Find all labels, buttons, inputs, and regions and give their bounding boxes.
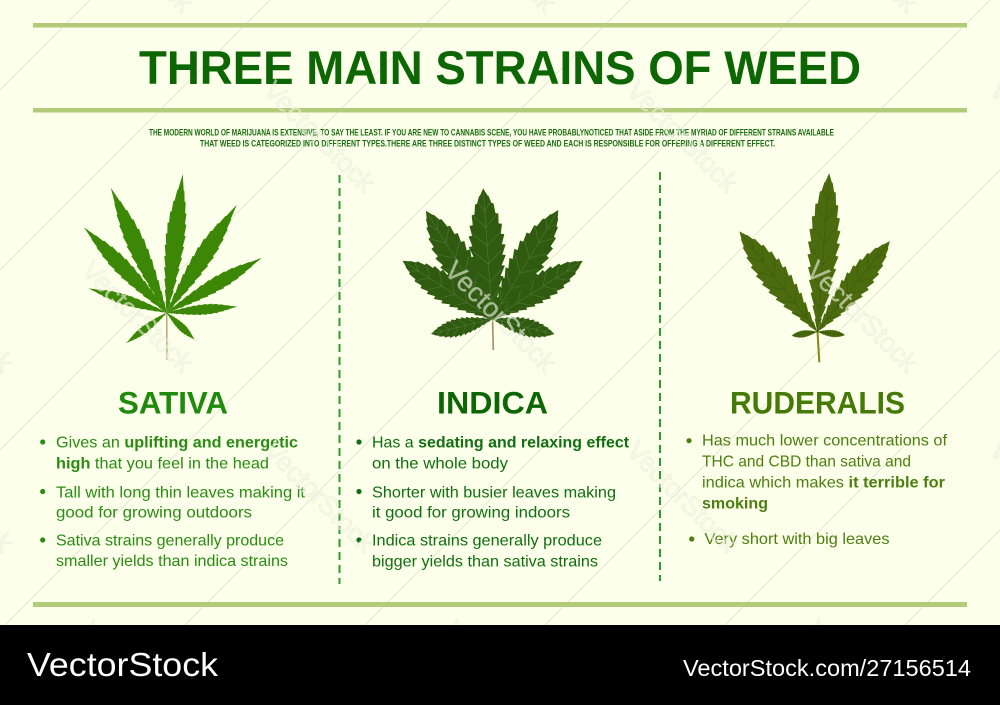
intro text: THAT WEED IS CATEGORIZED INTO DIFFERENT TYPES.THERE ARE THREE DISTINCT TYPES OF WEED AND EACH IS RESPONSIBLE FOR OFFERING A DIFFERENT EFFECT. <box>200 138 775 148</box>
bullet list: sativa: smaller yields than indica strains <box>56 553 288 570</box>
divider: left <box>338 175 340 584</box>
title: THREE MAIN STRAINS OF WEED <box>139 42 861 95</box>
bullet list: indica: Indica strains generally produce <box>372 533 602 550</box>
bullet list: indica: on the whole body <box>372 455 508 472</box>
bullet list: indica <box>356 435 630 570</box>
watermark: VectorStock <box>76 255 199 378</box>
watermark: VectorStock <box>439 255 562 378</box>
title rule <box>33 108 967 112</box>
watermark: VectorStock <box>801 255 924 378</box>
panel: indica <box>356 384 630 570</box>
bullet list: sativa: Sativa strains generally produce <box>56 533 284 550</box>
bullet list: ruderalis: THC and CBD than sativa and <box>702 454 911 471</box>
bullet list: indica: Shorter with busier leaves making <box>372 484 616 501</box>
icon: indica leaf <box>394 187 591 350</box>
heading: ruderalis: RUDERALIS <box>730 384 905 420</box>
bullet list: ruderalis: smoking <box>702 495 768 512</box>
heading: indica: INDICA <box>437 384 548 420</box>
footer image id: VectorStock.com/27156514 <box>683 655 971 681</box>
bullet list: ruderalis <box>686 433 948 548</box>
bullet list: sativa: Gives an uplifting and energetic <box>56 435 298 452</box>
bullet list: indica: bigger yields than sativa strains <box>372 554 598 570</box>
icon: sativa leaf <box>78 173 266 360</box>
icon: ruderalis leaf <box>728 172 901 362</box>
top rule <box>33 23 967 28</box>
heading: sativa: SATIVA <box>118 384 228 420</box>
bullet list: ruderalis: Has much lower concentrations of <box>702 433 948 450</box>
footer brand: VectorStock <box>27 647 218 684</box>
intro text <box>149 126 834 148</box>
bullet list: sativa <box>40 435 306 570</box>
watermark: VectorStock <box>258 75 381 198</box>
watermark: VectorStock <box>258 435 381 558</box>
bullet list: sativa: Tall with long thin leaves making it <box>56 484 306 501</box>
panel: sativa <box>40 384 306 570</box>
watermark: VectorStock <box>621 75 744 198</box>
footer bar <box>0 625 1000 705</box>
bullet list: ruderalis: Very short with big leaves <box>704 531 890 548</box>
bullet list: indica: Has a sedating and relaxing effect <box>372 435 630 452</box>
bullet list: ruderalis: indica which makes it terrible for <box>702 474 945 491</box>
bottom rule <box>33 602 967 607</box>
bullet list: indica: it good for growing indoors <box>372 505 570 522</box>
bullet list: sativa: good for growing outdoors <box>56 505 252 522</box>
panel: ruderalis <box>686 384 948 548</box>
divider: right <box>659 172 661 581</box>
bullet list: sativa: high that you feel in the head <box>56 455 269 472</box>
watermark: VectorStock <box>621 435 744 558</box>
